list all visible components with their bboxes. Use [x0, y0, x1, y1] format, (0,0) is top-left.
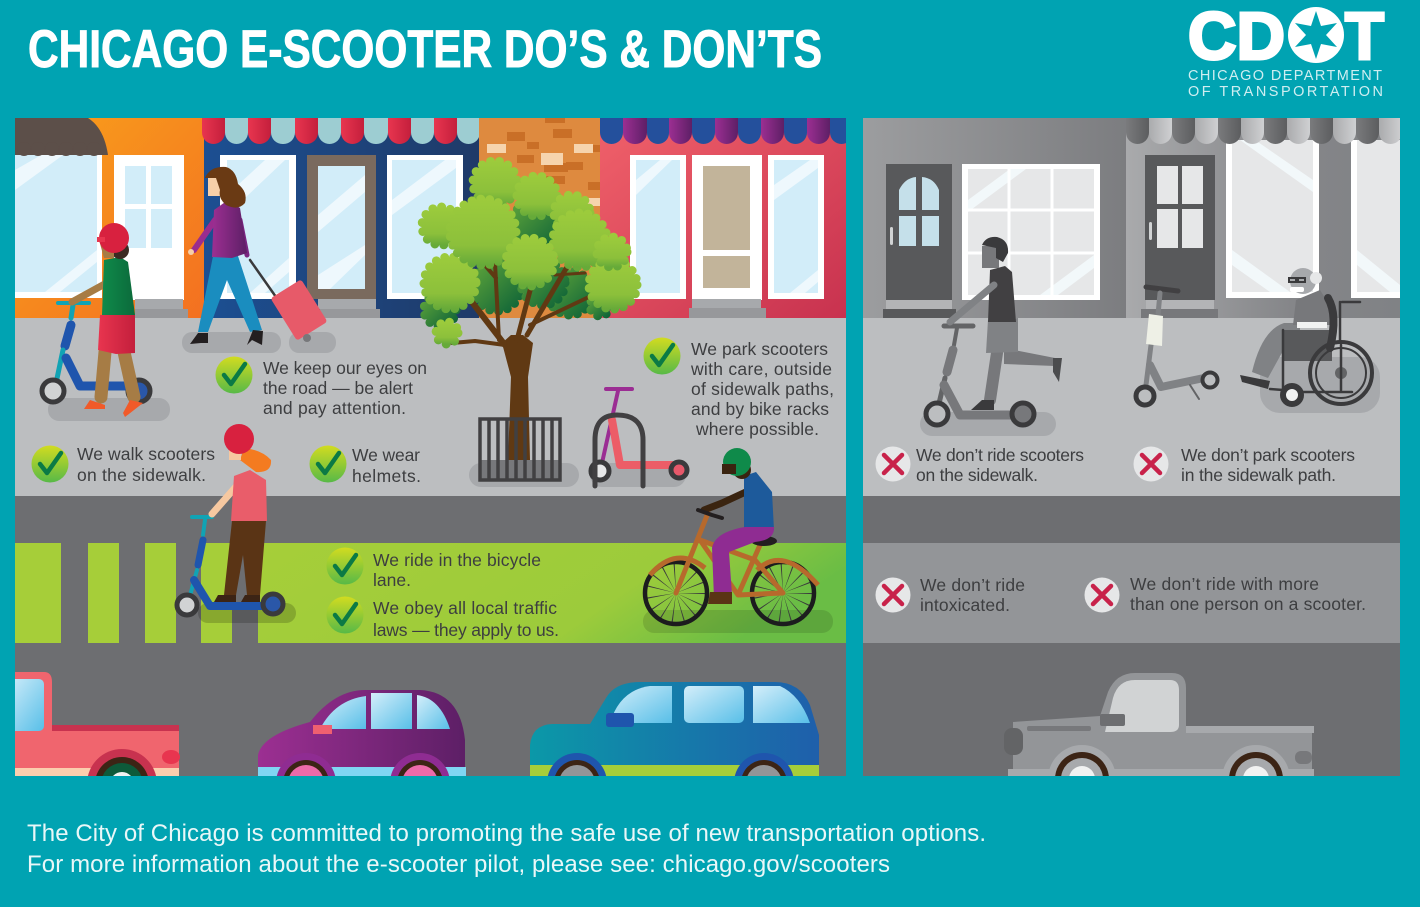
footer text: For more information about the e-scooter pilot, please see: chicago.gov/scooters — [27, 851, 890, 878]
gray awning — [1126, 118, 1400, 144]
don't: park in sidewalk path: We don’t park scooters — [1181, 445, 1355, 465]
blue and purple awning — [600, 118, 846, 144]
do: walk scooters: on the sidewalk. — [77, 465, 206, 485]
don't: ride intoxicated: intoxicated. — [920, 595, 1010, 615]
woman riding scooter — [177, 424, 296, 623]
don't: ride intoxicated: We don’t ride — [920, 575, 1025, 595]
do: ride in bicycle lane: We ride in the bicycle — [373, 550, 541, 570]
gray bike lane — [863, 543, 1400, 643]
do: obey traffic laws: We obey all local traffic — [373, 598, 557, 618]
red and teal awning — [202, 118, 479, 144]
gray building right — [1126, 118, 1400, 318]
don't: park in sidewalk path: in the sidewalk path. — [1181, 465, 1336, 485]
logo: CDOT — [1188, 0, 1384, 100]
do: park with care: with care, outside — [690, 359, 832, 379]
don't: park in sidewalk path — [1134, 445, 1355, 485]
do: wear helmets — [310, 446, 420, 482]
do: park with care: of sidewalk paths, — [691, 379, 834, 399]
do: obey traffic laws: laws — they apply to us. — [373, 620, 559, 640]
cyclist — [643, 448, 833, 633]
gray sidewalk — [863, 318, 1400, 496]
boy riding scooter on sidewalk — [920, 237, 1062, 436]
do: wear helmets: We wear — [352, 445, 420, 465]
don't: ride on sidewalk — [876, 446, 1084, 482]
do: park with care: where possible. — [695, 419, 819, 439]
woman walking with suitcase — [182, 167, 336, 353]
logo: CDOT: CD — [1188, 0, 1285, 74]
don't: ride intoxicated — [876, 575, 1025, 615]
parked pink scooter at bike rack — [590, 389, 687, 487]
panel: do's street scene — [15, 118, 846, 776]
pickup truck (pink) — [15, 672, 180, 776]
logo: CDOT: T — [1345, 0, 1384, 74]
do: ride in bicycle lane: lane. — [373, 570, 411, 590]
pickup truck (gray) — [1004, 673, 1314, 776]
logo: CDOT: CHICAGO DEPARTMENT — [1188, 68, 1382, 84]
tree grate — [469, 419, 579, 487]
footer text: The City of Chicago is committed to promoting the safe use of new transportation options. — [27, 820, 986, 847]
pink storefront — [600, 118, 846, 318]
do: eyes on the road: the road — be alert — [263, 378, 413, 398]
do: ride in bicycle lane — [326, 548, 541, 590]
do: wear helmets: helmets. — [352, 466, 421, 486]
do: eyes on the road: and pay attention. — [263, 398, 406, 418]
do: walk scooters — [32, 446, 214, 482]
do: obey traffic laws — [326, 596, 559, 640]
don't: ride on sidewalk: We don’t ride scooters — [916, 445, 1084, 465]
logo: CDOT: OF TRANSPORTATION — [1188, 84, 1383, 100]
don't: more than one rider: We don’t ride with more — [1130, 574, 1319, 594]
bike lane with crosswalk stripes — [15, 543, 846, 643]
don't: more than one rider: than one person on a scooter. — [1130, 594, 1366, 614]
tree — [422, 161, 637, 460]
brown awning — [15, 118, 108, 156]
orange storefront — [15, 118, 204, 318]
title: CHICAGO E-SCOOTER DO’S & DON’TS — [28, 20, 822, 79]
purple car — [258, 690, 466, 776]
gray road — [863, 496, 1400, 776]
gray building left — [863, 118, 1126, 318]
man in wheelchair — [1240, 268, 1380, 413]
don't: more than one rider — [1084, 574, 1366, 614]
footer text — [27, 820, 986, 878]
do: park with care — [644, 338, 834, 439]
brick wall — [479, 118, 600, 318]
road — [15, 496, 846, 776]
sidewalk — [15, 318, 846, 496]
do: eyes on the road: We keep our eyes on — [263, 358, 427, 378]
panel: don'ts street scene — [863, 100, 1402, 813]
don't: ride on sidewalk: on the sidewalk. — [916, 465, 1038, 485]
blue van — [530, 682, 819, 776]
do: walk scooters: We walk scooters — [77, 444, 215, 464]
scooter parked in path — [1136, 287, 1218, 405]
do: park with care: and by bike racks — [691, 399, 829, 419]
do: park with care: We park scooters — [691, 339, 828, 359]
pedestrian with scooter — [42, 223, 170, 421]
do: eyes on the road — [216, 356, 427, 418]
blue storefront — [204, 118, 479, 318]
